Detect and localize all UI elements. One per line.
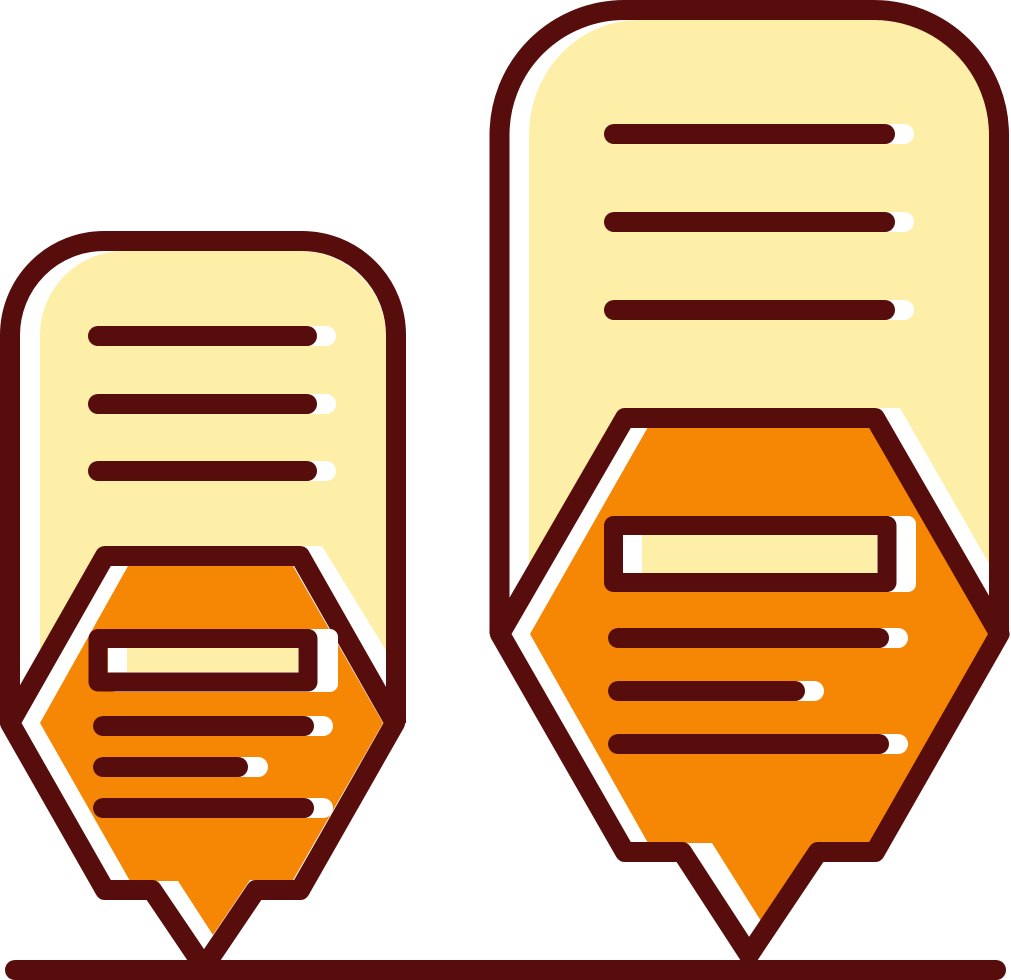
small panel text lines	[98, 336, 326, 471]
small hexagon white highlight	[300, 546, 387, 700]
large hexagon outline	[500, 418, 1000, 955]
small cream panel fill	[40, 251, 386, 700]
small hexagon orange fill	[40, 566, 383, 935]
small hexagon outline	[10, 556, 395, 967]
large hexagon white highlight	[875, 408, 991, 640]
small panel outline	[10, 241, 396, 723]
panel: small bubble marker	[10, 241, 396, 967]
small hexagon text lines	[103, 726, 323, 808]
large cream panel fill	[529, 20, 991, 620]
panel: large bubble marker	[500, 10, 1000, 955]
small hexagon title box	[98, 629, 338, 692]
small hexagon white backing	[10, 556, 395, 962]
large panel text lines	[614, 134, 904, 310]
baseline	[15, 960, 996, 980]
large hexagon title box	[614, 516, 916, 592]
large hexagon text lines	[618, 638, 898, 744]
large panel outline	[500, 10, 999, 634]
large hexagon orange fill	[530, 427, 989, 921]
large hexagon white backing	[500, 418, 1000, 955]
